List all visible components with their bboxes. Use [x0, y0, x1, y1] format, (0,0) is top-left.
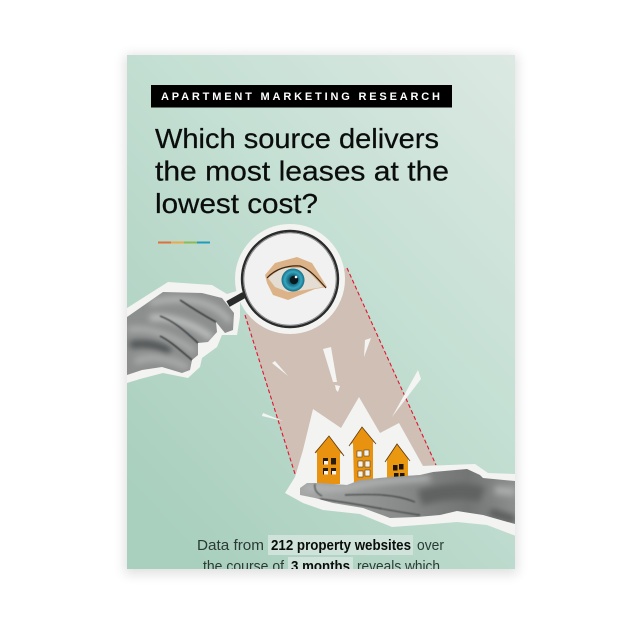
light beam — [245, 268, 436, 474]
title: the most leases at the — [155, 156, 449, 186]
hand with magnifying glass — [127, 282, 240, 383]
paper burst and lower hand backing — [285, 397, 516, 536]
label bar — [151, 85, 452, 108]
label bar: APARTMENT MARKETING RESEARCH — [161, 91, 440, 103]
title: lowest cost? — [155, 188, 318, 219]
orange houses — [315, 427, 410, 484]
house left — [315, 436, 344, 484]
card shadow — [125, 55, 517, 574]
lower open hand — [300, 469, 515, 524]
highlighted intro text: over — [417, 538, 444, 554]
highlighted intro text — [198, 535, 444, 569]
house right — [385, 444, 410, 482]
icon: eye — [265, 257, 327, 300]
magnifying glass — [228, 224, 345, 334]
highlighted intro text: the course of — [203, 559, 285, 575]
exclamation and shards — [262, 338, 421, 421]
title — [155, 128, 448, 214]
title: Which source delivers — [155, 123, 439, 154]
house centre — [349, 427, 376, 484]
poster card — [127, 55, 516, 577]
highlighted intro text: 212 property websites — [271, 538, 411, 554]
highlighted intro text: reveals which — [357, 559, 440, 575]
colour accent rule — [158, 242, 210, 244]
highlighted intro text: 3 months — [291, 559, 350, 575]
highlighted intro text: Data from — [197, 538, 264, 554]
